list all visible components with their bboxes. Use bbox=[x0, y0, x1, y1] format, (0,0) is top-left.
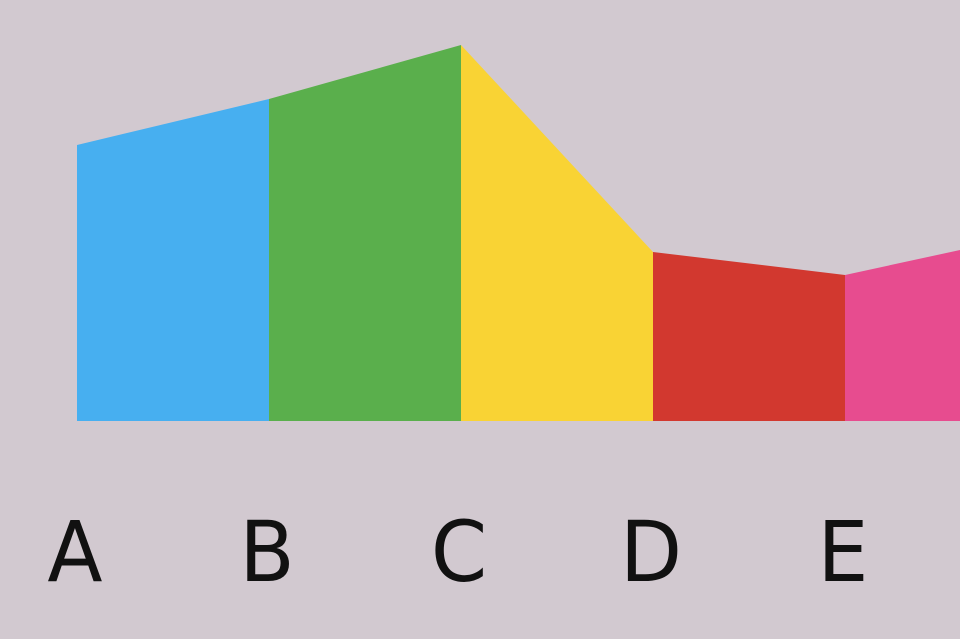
segment E pink bbox=[845, 250, 960, 421]
label A: A bbox=[47, 504, 103, 601]
axis labels bbox=[47, 504, 868, 601]
label E: E bbox=[818, 504, 868, 601]
label B: B bbox=[239, 504, 295, 601]
segment A blue bbox=[77, 99, 269, 421]
segment D red bbox=[653, 252, 845, 421]
label D: D bbox=[620, 504, 682, 601]
segment B green bbox=[269, 45, 461, 421]
label C: C bbox=[431, 504, 487, 601]
segment C yellow bbox=[461, 45, 653, 421]
